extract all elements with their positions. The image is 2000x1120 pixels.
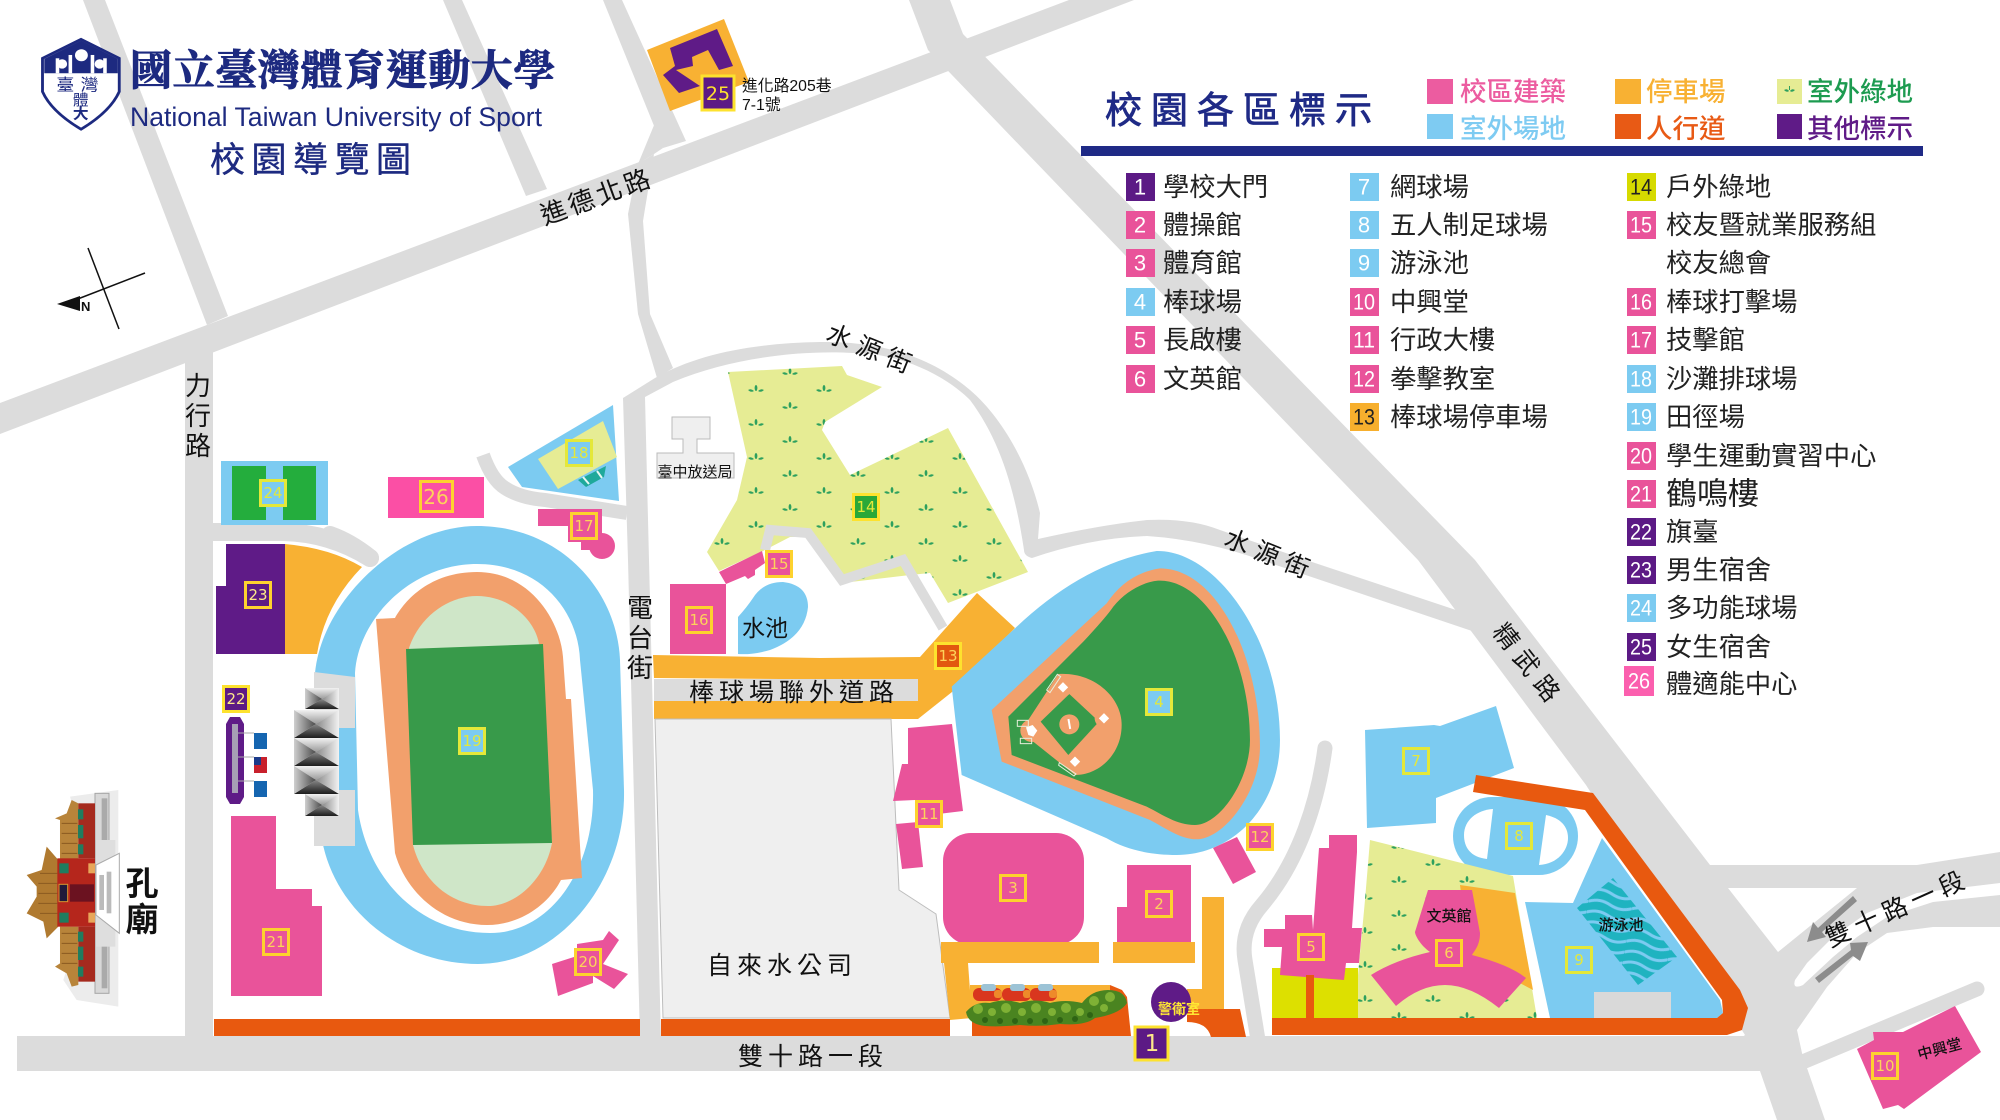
legend: list column 3: 旗臺 <box>1666 517 1719 547</box>
legend: list column 3 <box>1624 172 1876 699</box>
map marker 12 <box>1248 824 1272 850</box>
Confucius temple <box>27 790 119 1007</box>
building 21 <box>231 816 322 996</box>
building 2 <box>1117 865 1191 942</box>
arrow: eastbound <box>1815 942 1868 983</box>
map marker 18 <box>566 440 592 466</box>
legend: list column 1: 長啟樓 <box>1163 325 1242 355</box>
title: English name: National Taiwan University of Sport <box>130 102 542 132</box>
map marker 26 <box>420 482 452 512</box>
green area 6 <box>1354 840 1537 1018</box>
road end over stadium <box>330 535 370 558</box>
legend: list column 3: 14 <box>1630 174 1652 200</box>
map marker 20: 20 <box>578 953 598 971</box>
label: guard room: 警衛室 <box>1158 1001 1200 1017</box>
map marker 1 <box>1135 1027 1168 1060</box>
stands base <box>314 672 355 846</box>
map marker 7 <box>1404 748 1428 774</box>
legend: list column 3: 沙灘排球場 <box>1666 364 1797 394</box>
logo shield: 臺灣 <box>56 75 105 94</box>
building 20 <box>552 931 628 996</box>
legend rule <box>1081 146 1923 156</box>
hedge <box>966 990 1127 1026</box>
legend: list column 2 <box>1350 172 1548 432</box>
title: campus map: 校園導覽圖 <box>210 141 418 180</box>
legend: list column 1: 1 <box>1134 174 1146 200</box>
legend: list column 2: 五人制足球場 <box>1390 210 1548 240</box>
map marker 4 <box>1146 690 1172 714</box>
building 23 men's dormitory <box>216 544 285 654</box>
legend: list column 2: 中興堂 <box>1390 287 1469 317</box>
map marker 22: 22 <box>226 690 246 708</box>
legend: list column 3: 多功能球場 <box>1666 593 1797 623</box>
legend: list column 3: 校友總會 <box>1666 248 1771 278</box>
legend: list column 3: 23 <box>1630 558 1652 582</box>
legend: list column 2: 游泳池 <box>1390 248 1469 278</box>
map marker 7: 7 <box>1411 752 1421 770</box>
road labels: 台 <box>627 623 653 653</box>
access road grey strip <box>654 679 918 701</box>
road labels: 水源街 <box>822 320 922 382</box>
road labels: 雙十路一段 <box>738 1043 888 1071</box>
building 12 <box>1213 837 1256 884</box>
map marker 19 <box>460 728 484 754</box>
legend: list column 2: 網球場 <box>1390 172 1469 202</box>
legend: list column 2: 棒球場停車場 <box>1390 402 1548 432</box>
legend: list column 3: 22 <box>1630 520 1652 544</box>
map marker 3: 3 <box>1008 879 1018 897</box>
legend: list column 2: 行政大樓 <box>1390 325 1495 355</box>
legend: list column 2: 10 <box>1353 290 1375 314</box>
parking and access road 13 <box>653 593 1015 719</box>
legend: list column 1: 5 <box>1134 328 1146 352</box>
map marker 16 <box>686 608 712 632</box>
road labels: 水源街 <box>1220 525 1320 587</box>
legend: list column 1: 體操館 <box>1163 210 1242 240</box>
legend: list column 3: 19 <box>1630 404 1652 430</box>
legend heading: 校園各區標示 <box>1105 90 1381 131</box>
legend: list column 2: 9 <box>1358 250 1370 276</box>
map marker 12: 12 <box>1250 828 1270 846</box>
map marker 25 <box>702 76 734 110</box>
map marker 6: 6 <box>1444 944 1454 962</box>
swimming pool area 9 <box>1525 838 1723 1018</box>
legend: category key: 室外場地 <box>1460 114 1566 144</box>
map marker 23 <box>246 582 270 608</box>
building 16 <box>670 584 726 654</box>
label: Confucius temple: 孔 <box>126 865 158 902</box>
map marker 14 <box>854 494 878 520</box>
building 23 parking <box>285 544 362 654</box>
broadcasting station <box>657 417 734 478</box>
map marker 24: 24 <box>263 484 283 502</box>
guard room <box>1151 982 1191 1022</box>
road cut-outs <box>1728 883 2000 987</box>
map marker 21 <box>264 930 288 954</box>
building 6 <box>1371 890 1526 1008</box>
icon: compass <box>57 248 145 329</box>
map marker 13 <box>936 644 960 668</box>
futsal court 8 <box>1453 797 1578 875</box>
cars <box>973 984 1057 1001</box>
building 11 <box>893 724 963 869</box>
logo shield: 體 <box>73 93 89 109</box>
legend: category key: 室外綠地 <box>1807 77 1913 107</box>
label: building 10: 中興堂 <box>1916 1036 1964 1064</box>
legend: list column 2: 7 <box>1358 174 1370 200</box>
map marker 26: 26 <box>423 485 449 509</box>
walkway stem <box>1306 975 1314 1018</box>
label: dormitory address: 進化路205巷 <box>742 77 832 95</box>
map marker 10: 10 <box>1875 1057 1895 1075</box>
building 3 <box>943 833 1084 945</box>
legend: list column 3: 16 <box>1630 290 1652 314</box>
legend: list column 2: 13 <box>1353 404 1375 430</box>
path through green area <box>765 530 943 628</box>
water company <box>655 719 950 1018</box>
map marker 14: 14 <box>856 498 876 516</box>
title: university name: 國立臺灣體育運動大學 <box>130 38 556 98</box>
parking strips near gate <box>941 897 1224 1020</box>
building 10 <box>1857 1006 1981 1109</box>
map marker 8 <box>1506 824 1532 848</box>
legend: list column 3: 26 <box>1628 668 1650 694</box>
sidewalk east <box>1272 775 1748 1035</box>
legend: list column 3: 體適能中心 <box>1666 669 1797 699</box>
legend: list column 1: 3 <box>1134 250 1146 276</box>
building 15 <box>719 551 765 584</box>
map marker 18: 18 <box>569 444 589 462</box>
label: broadcasting station: 臺中放送局 <box>657 464 733 481</box>
legend: list column 3: 校友暨就業服務組 <box>1666 210 1876 240</box>
map marker 24 <box>260 480 286 506</box>
map marker 10 <box>1872 1054 1898 1078</box>
road labels: 路 <box>185 431 211 461</box>
logo shield: 大 <box>73 105 89 122</box>
legend: list column 3: 17 <box>1630 328 1652 352</box>
map marker 8: 8 <box>1514 827 1524 845</box>
label: pond: 水池 <box>742 615 788 641</box>
map marker 6 <box>1436 940 1462 966</box>
legend: list column 1 <box>1126 172 1268 394</box>
sidewalk south west <box>214 1019 950 1036</box>
legend: list column 3: 15 <box>1630 212 1652 238</box>
icon: compass: N <box>81 299 90 314</box>
road labels: 雙十路一段 <box>1821 864 1974 953</box>
road labels <box>185 162 1974 1071</box>
flag platform 22 <box>226 717 267 804</box>
map marker 19: 19 <box>462 732 482 750</box>
legend: list column 3: 18 <box>1630 366 1652 392</box>
logo shield <box>42 39 119 129</box>
legend: list column 3: 學生運動實習中心 <box>1666 441 1876 471</box>
map marker 11 <box>916 802 942 826</box>
map marker 1: 1 <box>1145 1031 1159 1057</box>
legend: category key: 人行道 <box>1646 114 1726 144</box>
map marker 4: 4 <box>1154 693 1164 711</box>
green area 14 <box>707 366 1028 603</box>
map marker 11: 11 <box>919 805 939 823</box>
legend: list column 3: 24 <box>1630 596 1652 620</box>
legend: list column 3: 男生宿舍 <box>1666 555 1771 585</box>
building 5 <box>1264 835 1362 980</box>
legend: category key: 停車場 <box>1646 77 1726 107</box>
map marker 23: 23 <box>248 586 268 604</box>
road labels: 街 <box>627 653 653 683</box>
swimming pool <box>1577 878 1677 985</box>
map marker 16: 16 <box>689 611 709 629</box>
map marker 9: 9 <box>1574 951 1584 969</box>
legend: list column 1: 4 <box>1134 290 1146 314</box>
label: Confucius temple: 廟 <box>126 901 158 938</box>
label: dormitory address: 7-1號 <box>742 96 781 114</box>
baseball field <box>952 551 1280 855</box>
map marker 13: 13 <box>938 647 958 665</box>
map marker 17: 17 <box>574 517 594 535</box>
map marker 17 <box>572 514 596 538</box>
legend: list column 1: 6 <box>1134 366 1146 392</box>
road labels: 行 <box>185 401 211 431</box>
yellow ground by building 5 <box>1272 968 1358 1018</box>
map marker 3 <box>1000 876 1026 900</box>
legend: list column 2: 12 <box>1353 366 1375 392</box>
label: swimming pool: 游泳池 <box>1598 917 1644 934</box>
building 17 <box>538 509 615 559</box>
map marker 15: 15 <box>769 555 789 573</box>
legend: list column 3: 鶴鳴樓 <box>1666 476 1759 512</box>
building 7 tennis court <box>1365 706 1514 828</box>
legend: list column 2: 8 <box>1358 212 1370 238</box>
map marker 21: 21 <box>266 933 286 951</box>
label: building 6: 文英館 <box>1426 907 1472 925</box>
stadium <box>315 526 624 964</box>
map marker 2: 2 <box>1154 895 1164 913</box>
legend: list column 3: 技擊館 <box>1666 325 1745 355</box>
road labels: 進德北路 <box>536 162 658 231</box>
road labels: 力 <box>185 371 211 401</box>
map marker 5 <box>1298 934 1324 960</box>
building 25 women's dormitory <box>647 19 749 111</box>
legend: list column 3: 21 <box>1630 482 1652 506</box>
label: water company: 自來水公司 <box>707 952 857 980</box>
map marker 25: 25 <box>706 83 730 105</box>
legend: list column 1: 棒球場 <box>1163 287 1242 317</box>
map marker 5: 5 <box>1306 938 1316 956</box>
legend: list column 3: 25 <box>1630 634 1652 660</box>
pond <box>738 582 808 654</box>
sidewalk at gate <box>972 985 1246 1037</box>
road labels: 電 <box>627 593 653 623</box>
map marker 15 <box>766 552 792 576</box>
legend: category key: 校區建築 <box>1460 77 1566 107</box>
pool building <box>1594 992 1671 1018</box>
map marker 2 <box>1146 892 1172 916</box>
legend: list column 3: 田徑場 <box>1666 402 1745 432</box>
legend: list column 2: 拳擊教室 <box>1390 364 1495 394</box>
building 26 <box>388 477 484 518</box>
legend: list column 1: 文英館 <box>1163 364 1242 394</box>
legend: list column 3: 女生宿舍 <box>1666 632 1771 662</box>
parking at building 6 <box>1460 885 1533 990</box>
arrow: westbound <box>1807 896 1857 942</box>
beach volleyball court 18 <box>508 405 619 501</box>
legend: list column 1: 體育館 <box>1163 248 1242 278</box>
map marker 9 <box>1566 948 1592 972</box>
legend: category key <box>1427 77 1913 144</box>
legend: list column 2: 11 <box>1353 328 1375 352</box>
map marker 22 <box>224 686 248 712</box>
legend: list column 1: 2 <box>1134 212 1146 238</box>
map marker 20 <box>576 950 600 974</box>
road labels: 精武路 <box>1487 618 1570 714</box>
legend: list column 3: 20 <box>1630 444 1652 468</box>
stands roof blocks <box>294 688 339 816</box>
label: access road: 棒球場聯外道路 <box>689 679 899 707</box>
legend: list column 3: 棒球打擊場 <box>1666 287 1797 317</box>
legend: category key: 其他標示 <box>1807 114 1913 144</box>
legend: list column 3: 戶外綠地 <box>1666 172 1771 202</box>
building 24 multifunction court <box>221 461 328 525</box>
legend: list column 1: 學校大門 <box>1163 172 1268 202</box>
